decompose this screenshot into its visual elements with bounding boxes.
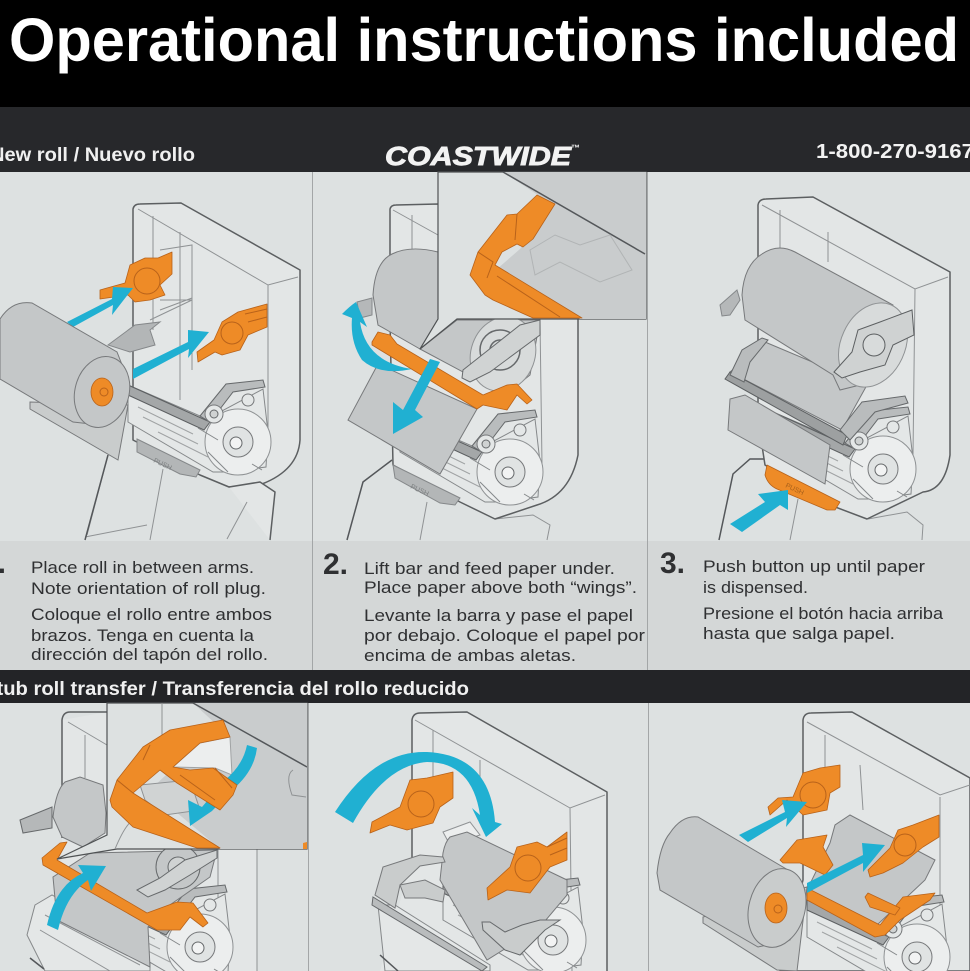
step 1 text: Coloque el rollo entre ambos bbox=[31, 606, 272, 624]
step 1 illustration bbox=[0, 203, 300, 540]
step 3 text: hasta que salga papel. bbox=[703, 625, 895, 643]
step 2 text: Lift bar and feed paper under. bbox=[364, 560, 615, 578]
step 2 text: encima de ambas aletas. bbox=[364, 647, 576, 665]
step 3 text: Push button up until paper bbox=[703, 558, 926, 576]
step 3 text: is dispensed. bbox=[703, 579, 808, 597]
header band text: ™ bbox=[571, 143, 580, 153]
step 1 text: brazos. Tenga en cuenta la bbox=[31, 627, 255, 645]
header band text: COASTWIDE bbox=[385, 141, 572, 171]
step 3 illustration bbox=[719, 197, 950, 540]
step 2 illustration: PUSH bbox=[409, 483, 430, 498]
step 2 illustration bbox=[342, 172, 646, 540]
step 1 text bbox=[0, 547, 272, 664]
lower step 3 illustration bbox=[657, 712, 970, 971]
step 3 text bbox=[660, 547, 944, 643]
step 3 text: Presione el botón hacia arriba bbox=[703, 605, 944, 623]
header band text bbox=[0, 141, 970, 171]
step 1 illustration: PUSH bbox=[152, 457, 173, 472]
title: Operational instructions included bbox=[9, 6, 959, 74]
lower step 1 illustration bbox=[20, 703, 307, 971]
step 3 text: 3. bbox=[660, 547, 685, 580]
step 2 text: por debajo. Coloque el papel por bbox=[364, 627, 646, 645]
step 1 text: Place roll in between arms. bbox=[31, 559, 254, 577]
header band text: 1-800-270-9167 bbox=[816, 141, 970, 163]
step 2 text: Place paper above both “wings”. bbox=[364, 579, 637, 597]
step 3 illustration: PUSH bbox=[784, 482, 805, 497]
step 2 text bbox=[323, 548, 646, 665]
step 1 text: Note orientation of roll plug. bbox=[31, 580, 266, 598]
step 2 text: 2. bbox=[323, 548, 348, 581]
lower step 2 illustration bbox=[335, 712, 607, 971]
step 1 text: dirección del tapón del rollo. bbox=[31, 646, 268, 664]
step 2 text: Levante la barra y pase el papel bbox=[364, 607, 633, 625]
